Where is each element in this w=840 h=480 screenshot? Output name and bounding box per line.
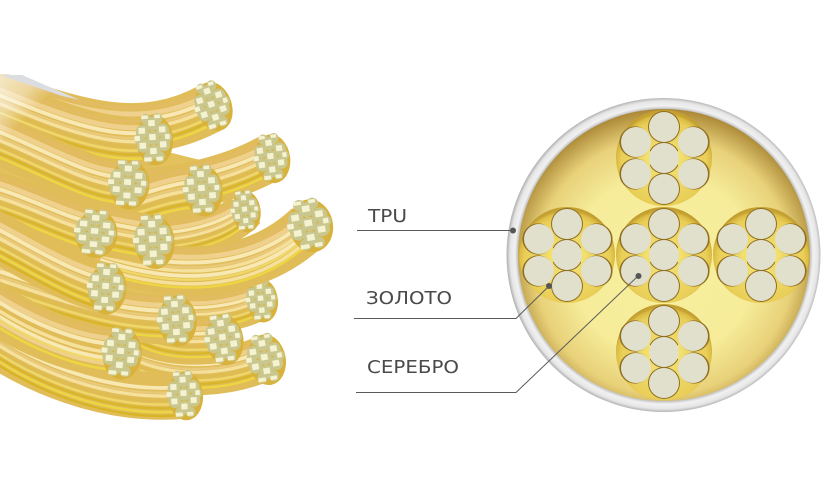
label: gold: ЗОЛОТО <box>366 288 452 309</box>
label: TPU: TPU <box>367 206 407 227</box>
strand D <box>100 163 225 232</box>
illustration: gold wire strands <box>0 60 337 422</box>
strand P <box>0 317 205 422</box>
leader line: silver <box>356 273 642 392</box>
wire bundle: right <box>713 207 809 303</box>
leader line: TPU <box>357 228 516 234</box>
strand I <box>40 200 176 270</box>
wire bundle: centre <box>616 207 712 303</box>
strand L <box>170 276 280 328</box>
wire bundle: top <box>616 110 712 206</box>
wire bundle: left <box>519 207 615 303</box>
strand K <box>0 260 199 348</box>
wire bundle: bottom <box>616 304 712 400</box>
strand E <box>140 131 293 208</box>
fade at upper-left corner <box>0 60 85 150</box>
gold fill <box>518 109 810 401</box>
pale grey edge at upper-left <box>0 75 80 100</box>
cross-section of the cable <box>506 98 820 412</box>
strand F <box>150 188 263 254</box>
strand M <box>140 311 247 368</box>
strand H <box>0 170 119 260</box>
white mask above the strands at upper-left <box>0 60 60 74</box>
strand B <box>0 72 175 167</box>
strand G <box>100 195 337 288</box>
strand O <box>140 330 290 388</box>
strand J <box>0 211 128 316</box>
label: silver: СЕРЕБРО <box>367 357 459 378</box>
strand backing <box>0 100 200 400</box>
strand N <box>0 270 144 381</box>
strand C <box>0 110 151 210</box>
TPU outer ring <box>506 98 820 412</box>
strand A <box>0 68 239 145</box>
leader line: gold <box>354 283 552 318</box>
